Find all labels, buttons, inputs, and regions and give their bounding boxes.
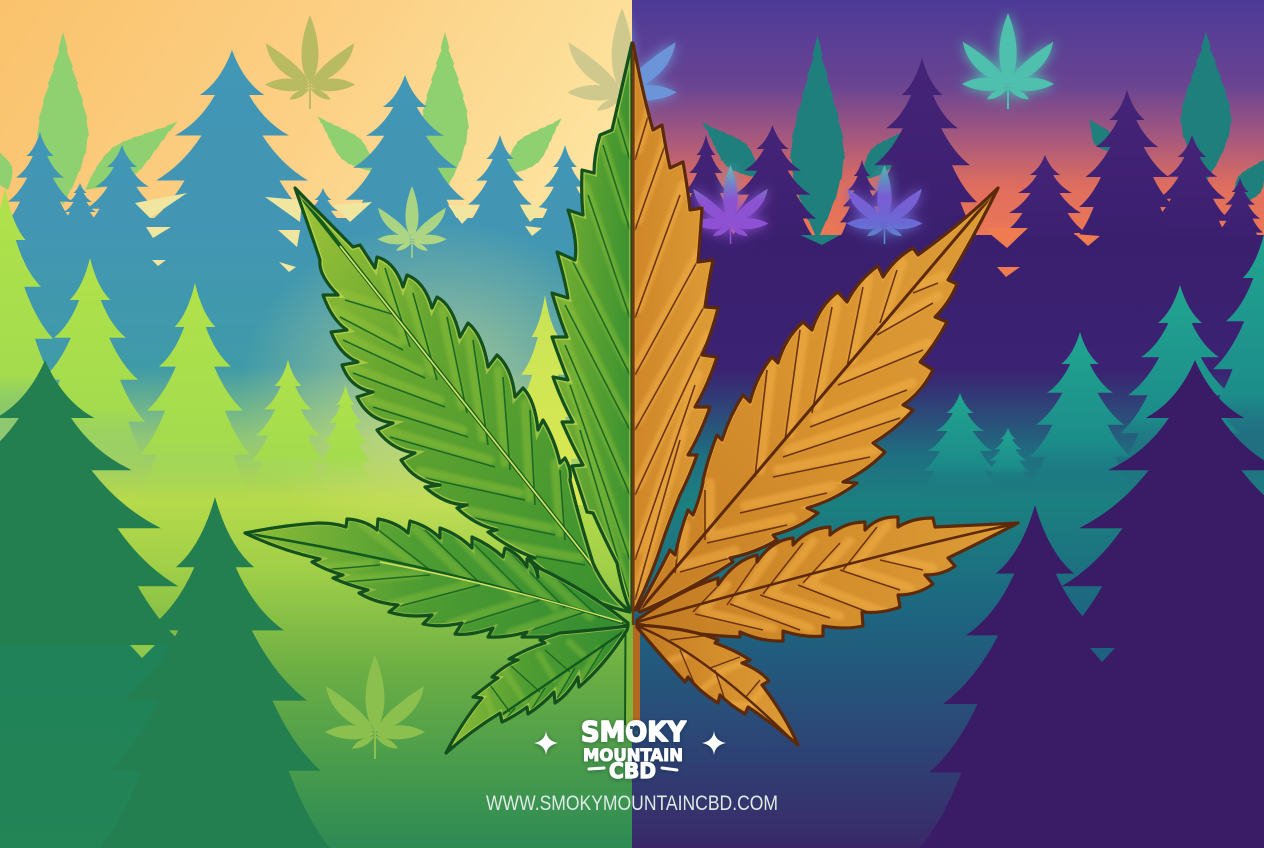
orange shards between trees: [983, 228, 1100, 277]
panel: right dusk forest background: [567, 0, 1264, 848]
logo eye dots: [630, 726, 638, 734]
lime green trees: [0, 188, 585, 505]
leaflet: orange bottom right: [637, 625, 798, 745]
leaflet: orange centre half: [633, 43, 718, 610]
blue trees and forest mass: [0, 50, 632, 848]
far teal serrated leaves: [692, 32, 1264, 240]
icon: glowing purple cannabis leaf: [693, 165, 768, 244]
logo word: SMOKY: SMOKY: [581, 715, 687, 748]
icon: glowing teal cannabis leaf: [962, 13, 1054, 109]
leaflet: green lower left: [245, 519, 628, 637]
logo word: MOUNTAIN: MOUNTAIN: [583, 746, 683, 766]
central seam: [632, 50, 634, 625]
leaflet: green centre half: [552, 43, 632, 610]
stem: [625, 625, 640, 725]
leaflet: orange lower right: [637, 517, 1018, 641]
teal leaf tip: [800, 235, 840, 245]
halo behind leaf: [256, 233, 580, 526]
logo dashes: [589, 768, 677, 770]
far light green serrated leaves: [0, 32, 572, 205]
icon: glowing blue cannabis leaf top centre: [632, 16, 680, 111]
teal trees: [920, 230, 1264, 493]
purple trees and forest mass: [632, 58, 1264, 848]
dark purple foreground trees: [920, 360, 1264, 848]
logo: Smoky Mountain CBD: [534, 715, 726, 783]
icon: left sparkle: [534, 731, 558, 755]
icon: right sparkle: [702, 731, 726, 755]
panel: left daytime forest background: [0, 0, 677, 848]
icon: glowing indigo cannabis leaf: [847, 165, 922, 244]
dark green foreground trees: [0, 360, 330, 848]
icon: pale cannabis leaf top left: [265, 15, 355, 109]
leaflet: orange upper right: [638, 188, 998, 612]
leaflet: green bottom left: [446, 626, 628, 753]
pale shards between trees: [135, 193, 545, 272]
icon: faint cannabis leaf bottom: [325, 655, 425, 759]
central split cannabis leaf: [245, 43, 1018, 753]
icon: pale cannabis leaf near centre top: [568, 8, 632, 111]
website address: WWW.SMOKYMOUNTAINCBD.COM: [486, 792, 778, 815]
logo word: CBD: CBD: [609, 759, 656, 783]
leaflet: green upper left: [295, 188, 630, 612]
icon: pale cannabis leaf on blue forest: [377, 186, 447, 258]
